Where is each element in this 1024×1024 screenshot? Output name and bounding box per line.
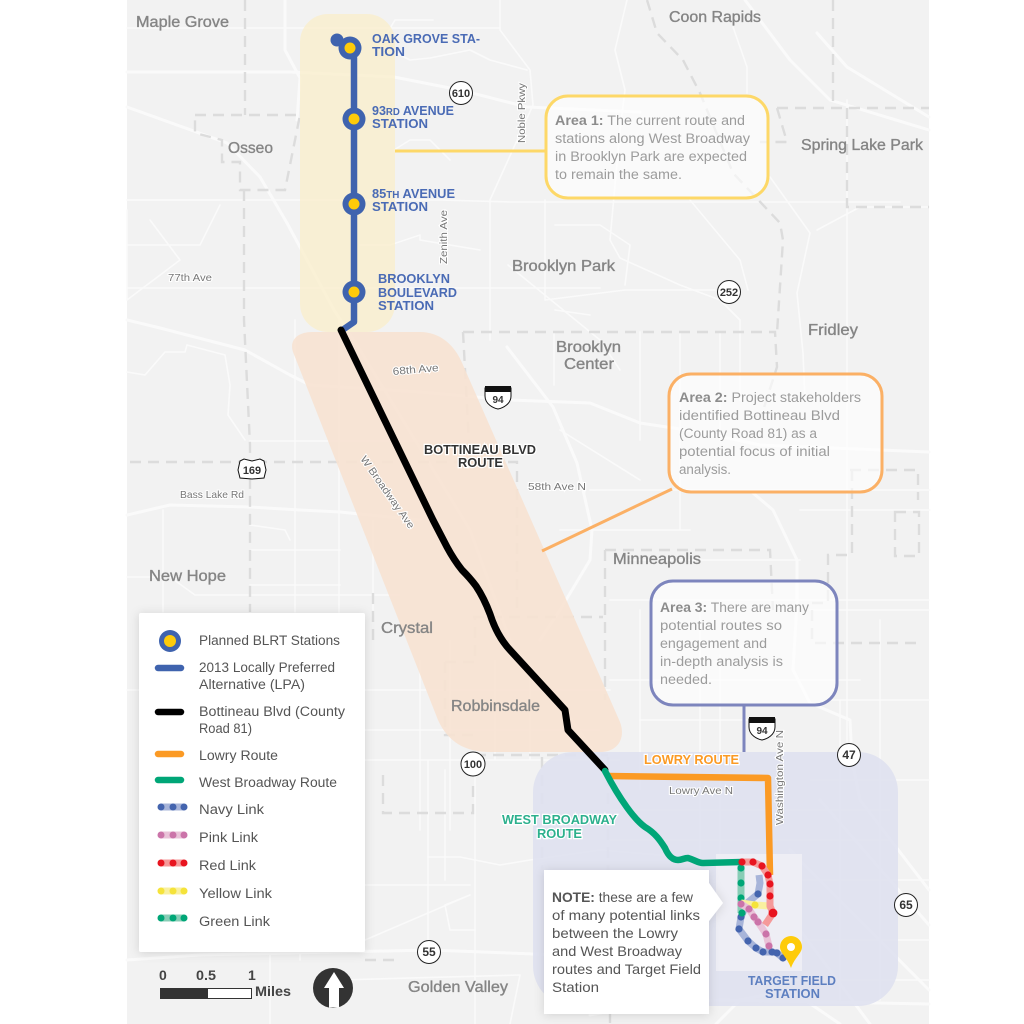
callout: area 1: in Brooklyn Park are expected <box>555 149 747 164</box>
scale bar <box>159 967 291 999</box>
station labels: TION <box>372 44 405 59</box>
station labels: 85TH AVENUE <box>372 186 455 201</box>
highway shields: 100 <box>464 759 482 771</box>
station labels: STATION <box>378 298 434 313</box>
icon: north arrow <box>313 968 353 1008</box>
red link <box>738 858 777 925</box>
green link <box>737 864 746 917</box>
callout: note: Station <box>552 979 599 995</box>
map labels: cities: Fridley <box>808 322 858 339</box>
potential links <box>735 858 787 962</box>
municipal boundaries <box>130 0 929 1024</box>
map labels: cities: Brooklyn Park <box>512 258 615 275</box>
map labels: cities <box>136 9 923 996</box>
legend text: Pink Link <box>199 830 258 845</box>
station labels: BOULEVARD <box>378 285 457 300</box>
highway shields: 94 <box>492 395 504 406</box>
scale bar: Miles <box>255 983 291 999</box>
callout: area 1 <box>546 96 768 198</box>
map labels: streets: 77th Ave <box>168 272 212 284</box>
yellow link <box>741 901 774 910</box>
highway shields: 610 <box>452 88 470 100</box>
highway shields: 65 <box>899 898 913 912</box>
map labels: cities: Brooklyn <box>556 339 621 356</box>
Target Field Station label <box>748 973 836 1001</box>
station labels: STATION <box>372 199 428 214</box>
panel: legend <box>139 613 365 952</box>
legend text: Alternative (LPA) <box>199 677 305 692</box>
highway shields: 169 <box>243 465 261 477</box>
callout: area 3: engagement and <box>660 636 767 651</box>
map labels: cities: Maple Grove <box>136 14 229 31</box>
callout: note: routes and Target Field <box>552 961 701 977</box>
road network <box>127 0 930 1024</box>
legend symbol: station <box>159 630 181 652</box>
station labels: 93RD AVENUE <box>372 103 454 118</box>
highway shields <box>238 82 918 964</box>
map labels: streets <box>168 82 786 825</box>
callout: area 2: analysis. <box>679 462 731 477</box>
map labels: cities: Robbinsdale <box>451 698 540 715</box>
legend text: West Broadway Route <box>199 775 337 790</box>
map labels: streets: Washington Ave N <box>774 730 786 825</box>
highway shields: 55 <box>422 945 436 959</box>
map labels: streets: Noble Pkwy <box>516 82 528 143</box>
legend text <box>199 633 345 929</box>
callout: area 2: identified Bottineau Blvd <box>679 408 840 423</box>
map labels: streets: 58th Ave N <box>528 481 586 493</box>
legend text: Bottineau Blvd (County <box>199 704 345 719</box>
map labels: cities: Spring Lake Park <box>801 137 923 154</box>
callout: area 1: Area 1: The current route and <box>555 113 745 128</box>
panel: area 1 zone <box>300 14 395 332</box>
map labels: cities: Crystal <box>381 620 433 637</box>
map labels: cities: Minneapolis <box>613 551 701 568</box>
callout: area 1: to remain the same. <box>555 167 682 182</box>
callout: area 2 <box>669 374 882 492</box>
map labels: streets: W Broadway Ave <box>358 454 417 531</box>
highway shields: 94 <box>756 726 768 737</box>
callout: note <box>544 870 723 1014</box>
map background <box>127 0 929 1024</box>
map labels: streets: Lowry Ave N <box>669 785 733 797</box>
Target Field Station label: TARGET FIELD <box>748 973 836 988</box>
scale bar: 1 <box>248 967 256 983</box>
map labels: cities: Center <box>564 356 614 373</box>
highway shields: 47 <box>842 748 856 762</box>
scale bar: 0.5 <box>196 967 216 983</box>
route labels: ROUTE <box>537 826 582 841</box>
route labels: WEST BROADWAY <box>502 812 617 827</box>
legend text: 2013 Locally Preferred <box>199 660 335 675</box>
legend text: Yellow Link <box>199 886 272 901</box>
Target Field Station label: STATION <box>765 986 820 1001</box>
legend text: Planned BLRT Stations <box>199 633 340 648</box>
navy link <box>735 875 787 962</box>
panel: area 2 zone <box>292 332 622 752</box>
station labels: OAK GROVE STA- <box>372 31 480 46</box>
callout: area 3 <box>651 581 837 705</box>
callout: area 3: in-depth analysis is <box>660 654 783 669</box>
map labels: cities: Golden Valley <box>408 979 508 996</box>
route labels: BOTTINEAU BLVD <box>424 442 536 457</box>
legend text: Red Link <box>199 858 256 873</box>
callout: note: NOTE: these are a few <box>552 889 694 905</box>
scale bar: 0 <box>159 967 167 983</box>
legend text: Green Link <box>199 914 270 929</box>
map labels: streets: 68th Ave <box>392 362 439 378</box>
callout: area 3: potential routes so <box>660 618 782 633</box>
map labels: cities: New Hope <box>149 568 226 585</box>
route labels: LOWRY ROUTE <box>644 752 739 767</box>
callout: note: and West Broadway <box>552 943 682 959</box>
highway shields: 252 <box>720 287 738 299</box>
legend text: Lowry Route <box>199 748 278 763</box>
callout: area 2: (County Road 81) as a <box>679 426 817 441</box>
callout: area 1: stations along West Broadway <box>555 131 750 146</box>
callout: area 3: needed. <box>660 672 712 687</box>
legend text: Road 81) <box>199 721 252 736</box>
panel: area 3 zone <box>533 752 898 1006</box>
map labels: cities: Osseo <box>228 140 273 157</box>
callout: area 2: Area 2: Project stakeholders <box>679 390 861 405</box>
icon: Target Field pin <box>780 936 802 968</box>
map labels: cities: Coon Rapids <box>669 9 761 26</box>
station labels: BROOKLYN <box>378 271 450 286</box>
route: 2013 LPA blue line with stations <box>330 34 366 331</box>
route: West Broadway green <box>605 771 742 863</box>
callout: note: between the Lowry <box>552 925 678 941</box>
map labels: streets: Zenith Ave <box>438 210 450 264</box>
legend symbols: links <box>158 804 188 922</box>
legend symbols: routes <box>158 668 181 780</box>
map labels: streets: Bass Lake Rd <box>180 489 244 501</box>
station labels: STATION <box>372 116 428 131</box>
callout: area 2: potential focus of initial <box>679 444 830 459</box>
route labels: ROUTE <box>458 455 503 470</box>
route: Lowry orange <box>608 776 770 875</box>
callout: note: of many potential links <box>552 907 700 923</box>
callout: area 3: Area 3: There are many <box>660 600 809 615</box>
pink link <box>737 900 773 950</box>
route: Bottineau Blvd black <box>341 330 605 770</box>
route labels <box>424 442 739 841</box>
callout leader lines <box>395 151 744 752</box>
station labels <box>372 31 480 313</box>
legend text: Navy Link <box>199 802 264 817</box>
